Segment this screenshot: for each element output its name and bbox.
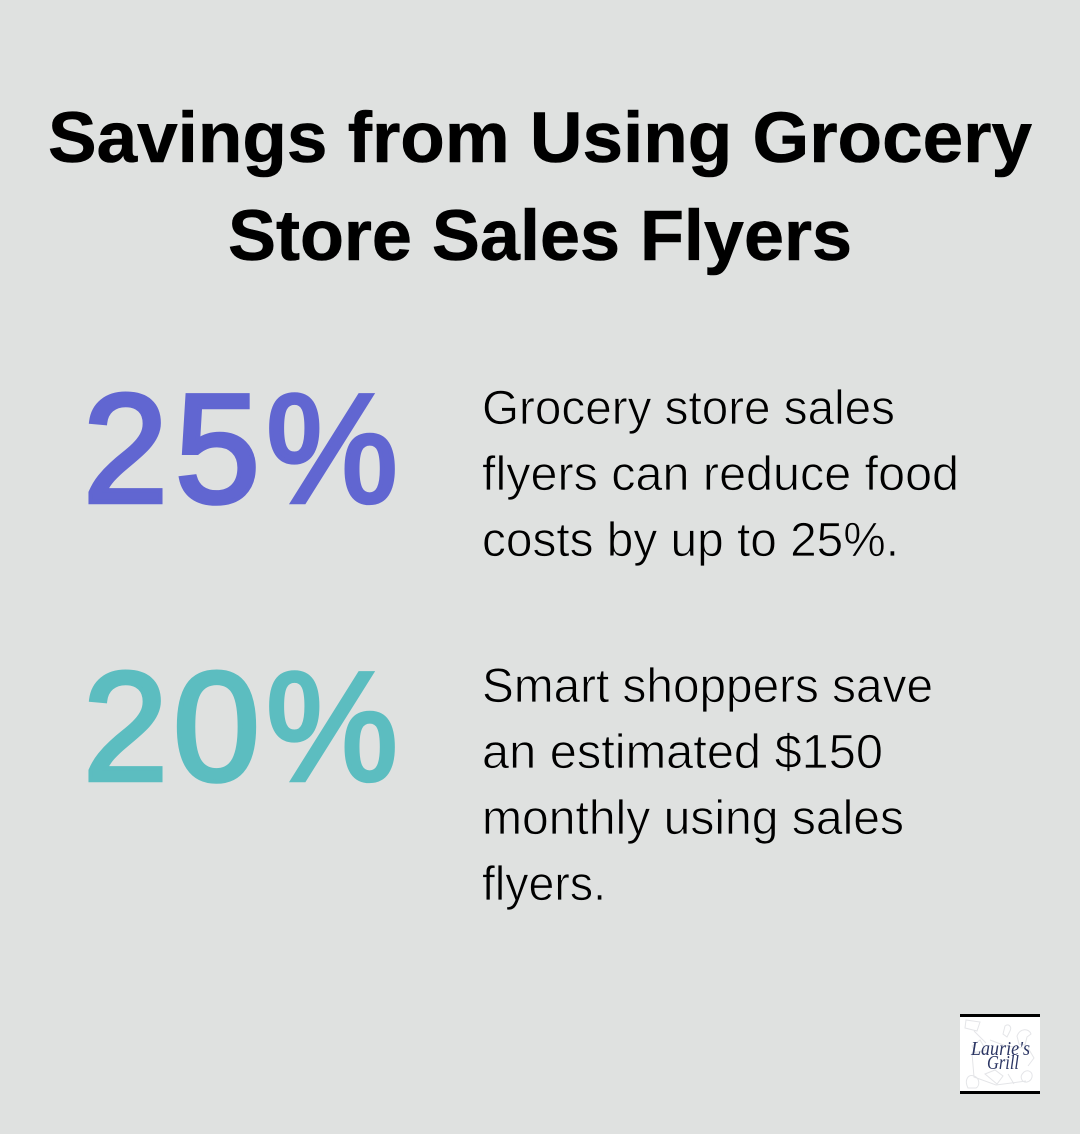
stat: 25%: 5 xyxy=(175,362,260,535)
stat: 20%: % xyxy=(266,640,398,813)
logo wordmark xyxy=(970,1038,1030,1074)
text block: monthly savings: monthly using sales xyxy=(482,792,904,845)
stat: 25%: % xyxy=(266,362,398,535)
text block: monthly savings: an estimated $150 xyxy=(482,726,883,779)
logo: Laurie's Grill xyxy=(960,1014,1040,1094)
text block: food cost reduction: flyers can reduce food xyxy=(482,448,959,501)
stat: 20%: 0 xyxy=(173,640,260,813)
text block: food cost reduction: costs by up to 25%. xyxy=(482,514,899,567)
stat: 25% xyxy=(83,362,398,535)
text block: food cost reduction xyxy=(482,382,959,567)
title xyxy=(48,99,1033,276)
text block: monthly savings xyxy=(482,660,933,911)
stat: 25%: 2 xyxy=(83,362,168,535)
text block: monthly savings: flyers. xyxy=(482,858,606,911)
text block: monthly savings: Smart shoppers save xyxy=(482,660,933,713)
stat: 20%: 2 xyxy=(83,640,168,813)
title: Store Sales Flyers xyxy=(228,197,852,276)
title: Savings from Using Grocery xyxy=(48,99,1033,178)
logo wordmark: Grill xyxy=(987,1052,1019,1074)
stat: 20% xyxy=(83,640,398,813)
text block: food cost reduction: Grocery store sales xyxy=(482,382,895,435)
logo wordmark: Laurie's xyxy=(970,1038,1030,1060)
